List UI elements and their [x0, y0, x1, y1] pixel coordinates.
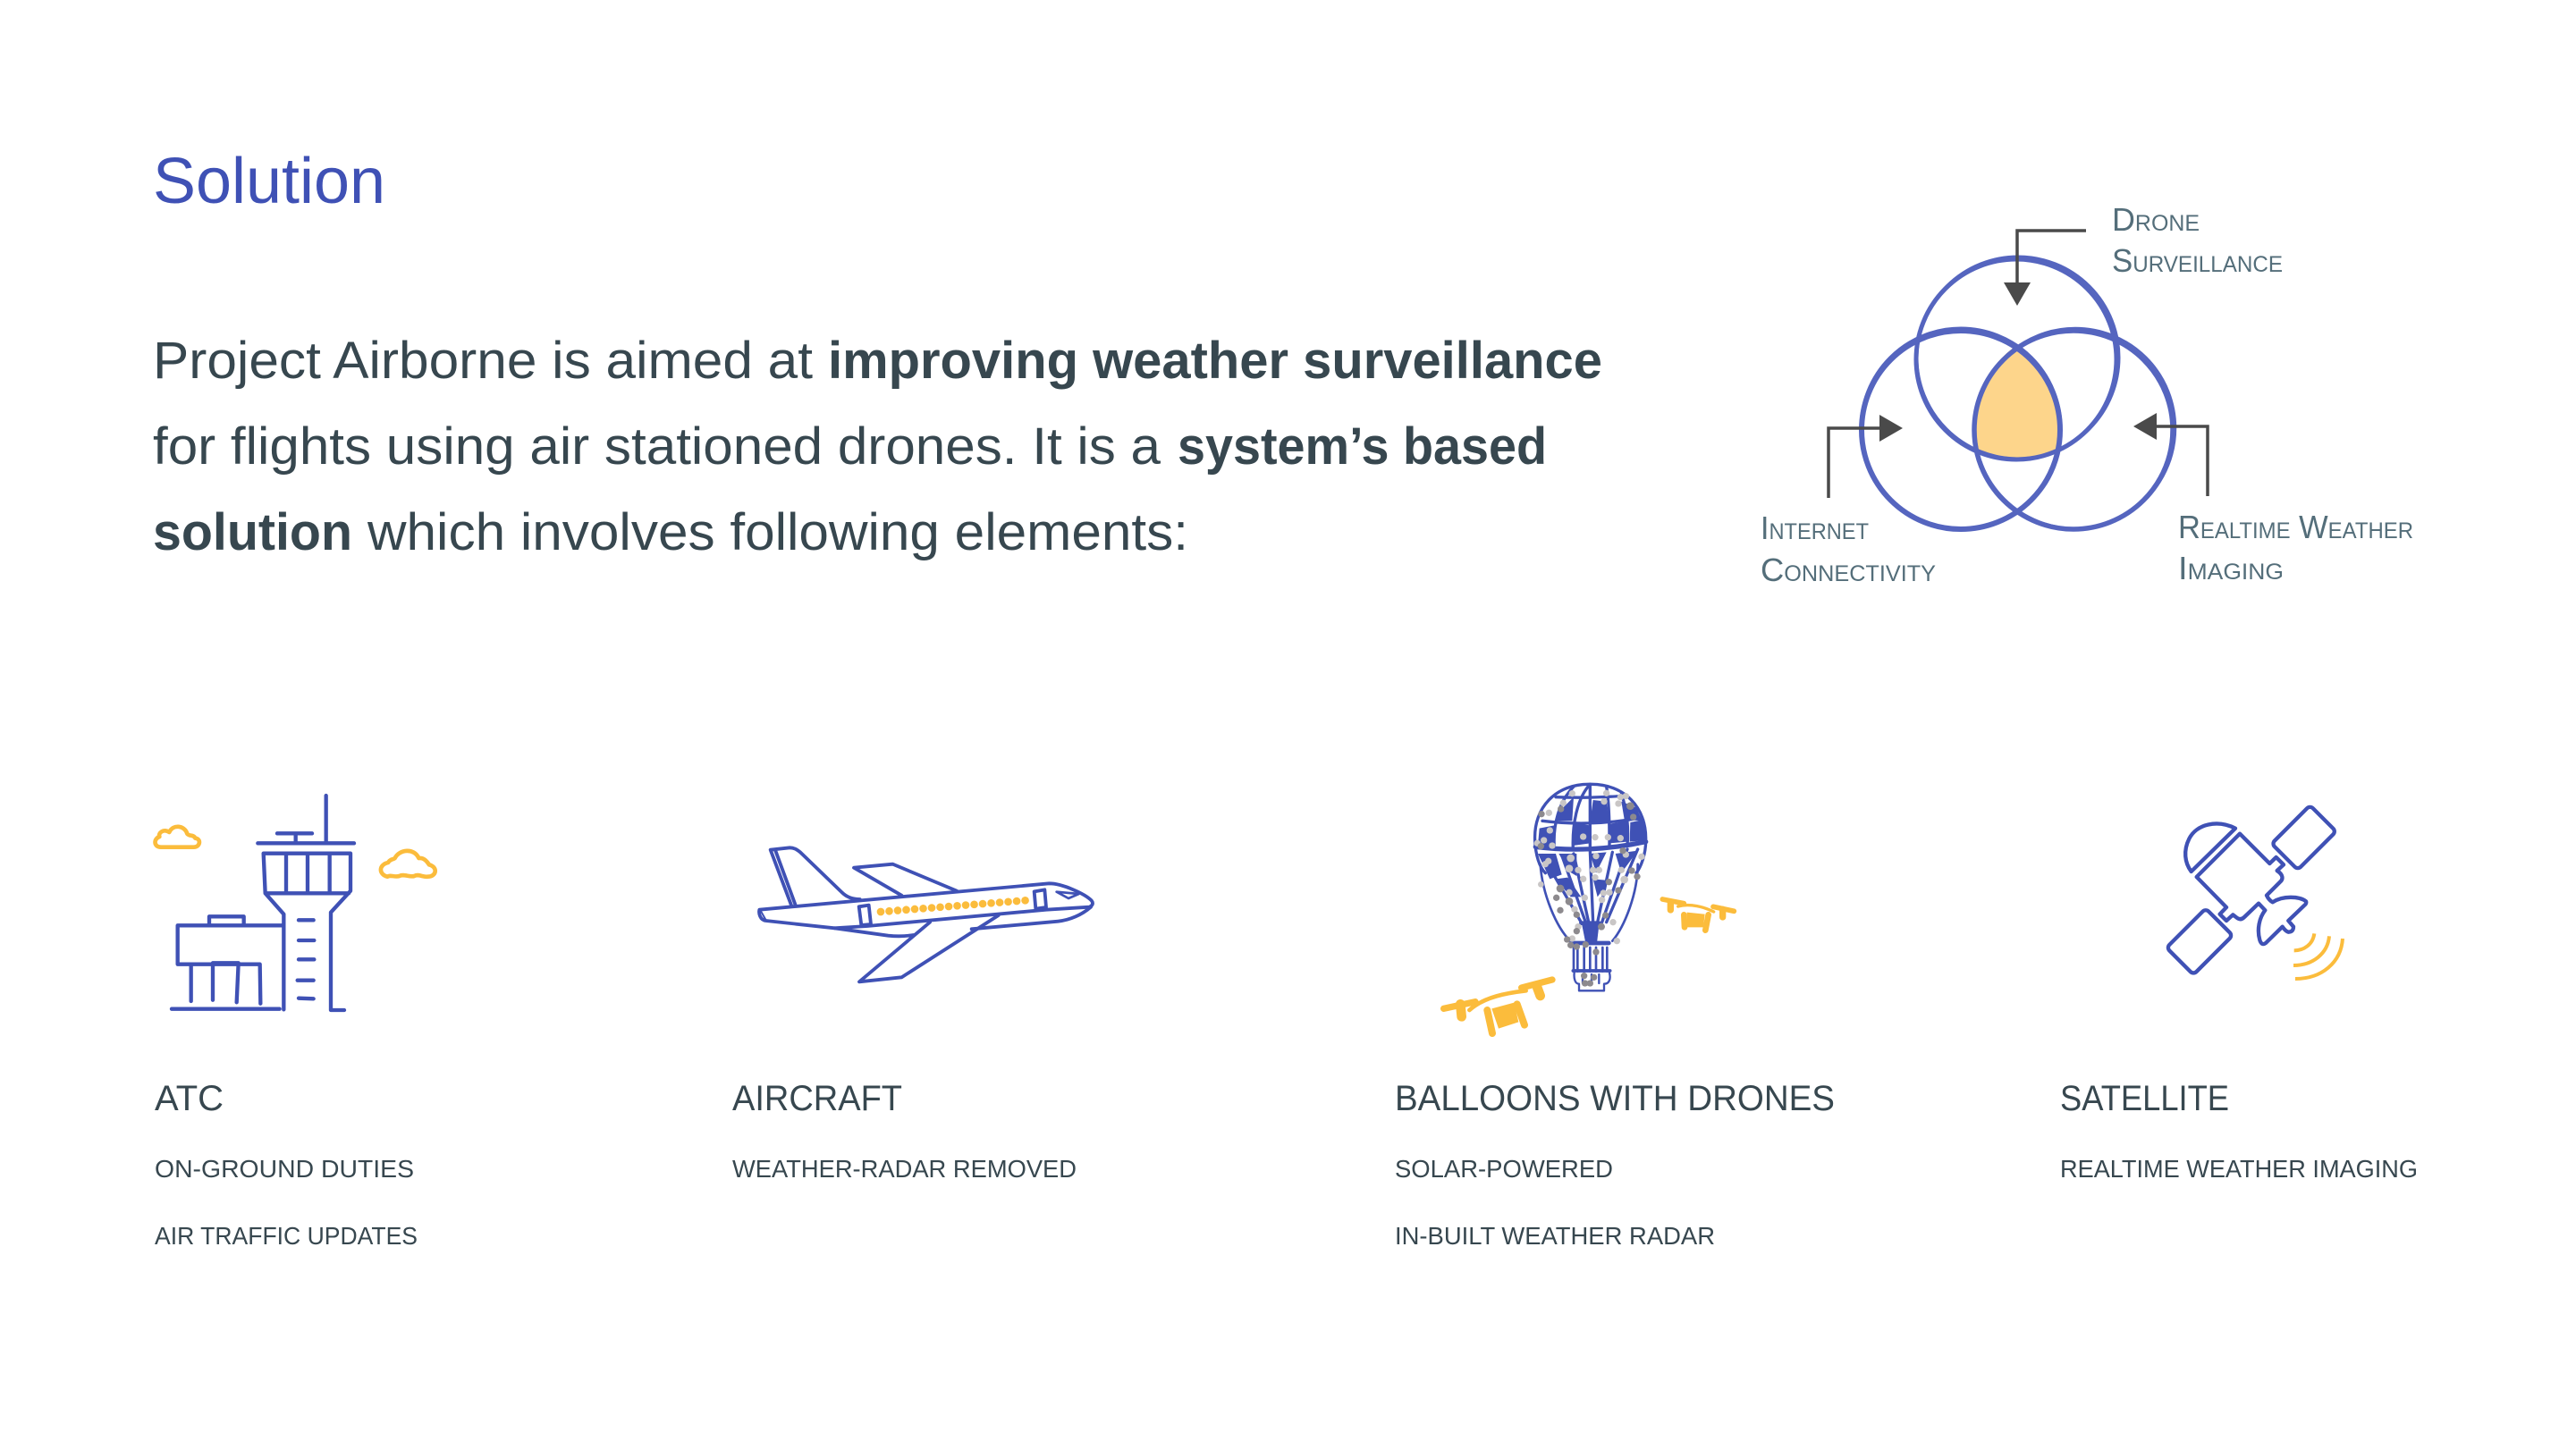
venn circle: drone surveillance — [1916, 257, 2119, 459]
label: drone surveillance — [2112, 201, 2283, 279]
arrow: realtime weather imaging — [2133, 413, 2208, 496]
label: internet connectivity: Internet — [1761, 510, 1869, 546]
infographic canvas — [153, 156, 2416, 1244]
icon: satellite — [2166, 805, 2343, 979]
icon: small drone — [1662, 899, 1734, 931]
text block: intro paragraph: Project Airborne is aimed at — [153, 332, 813, 390]
icon: airplane — [759, 847, 1093, 981]
text: on-ground duties: ON-GROUND DUTIES — [155, 1155, 414, 1183]
panel: satellite — [2060, 805, 2418, 1183]
label: internet connectivity: Connectivity — [1761, 552, 1936, 588]
venn circle: internet connectivity — [1861, 328, 2061, 529]
icon: large drone — [1444, 980, 1552, 1033]
icon: control tower with clouds — [156, 796, 435, 1010]
text block: intro paragraph — [153, 332, 1602, 561]
heading: ATC: ATC — [155, 1079, 224, 1118]
arrow: internet connectivity — [1829, 415, 1903, 498]
label: internet connectivity — [1761, 510, 1936, 588]
text: solar-powered: SOLAR-POWERED — [1395, 1155, 1613, 1183]
text block: intro paragraph: for flights using air stationed drones. It is a — [153, 417, 1161, 476]
panel: balloons with drones — [1395, 784, 1835, 1250]
heading: balloons with drones: BALLOONS WITH DRONES — [1395, 1079, 1835, 1118]
label: drone surveillance: Drone — [2112, 201, 2200, 238]
chart: venn diagram — [1761, 201, 2413, 588]
text: weather-radar removed: WEATHER-RADAR REMOVED — [732, 1155, 1077, 1183]
arrow: drone surveillance — [2004, 231, 2086, 306]
label: realtime weather imaging — [2178, 509, 2413, 586]
text block: intro paragraph: system’s based — [1178, 417, 1547, 476]
text block: intro paragraph: which involves following elements: — [367, 503, 1188, 561]
panel: ATC — [155, 796, 435, 1250]
heading: satellite: SATELLITE — [2060, 1079, 2229, 1118]
text block: intro paragraph: solution — [153, 503, 352, 561]
text: realtime weather imaging: REALTIME WEATHER IMAGING — [2060, 1155, 2418, 1183]
heading: aircraft: AIRCRAFT — [732, 1079, 902, 1118]
text: in-built weather radar: IN-BUILT WEATHER RADAR — [1395, 1222, 1715, 1250]
venn centre highlight — [1976, 349, 2057, 458]
label: realtime weather imaging: Imaging — [2178, 550, 2284, 586]
label: drone surveillance: Surveillance — [2112, 242, 2283, 279]
panel: aircraft — [732, 847, 1093, 1183]
text: air traffic updates: AIR TRAFFIC UPDATES — [155, 1222, 418, 1250]
icon: hot-air balloon — [1534, 784, 1646, 990]
venn circle: realtime weather imaging — [1974, 328, 2175, 529]
label: realtime weather imaging: Realtime Weather — [2178, 509, 2413, 545]
title: Solution — [153, 146, 385, 217]
text block: intro paragraph: improving weather surveillance — [828, 332, 1602, 390]
